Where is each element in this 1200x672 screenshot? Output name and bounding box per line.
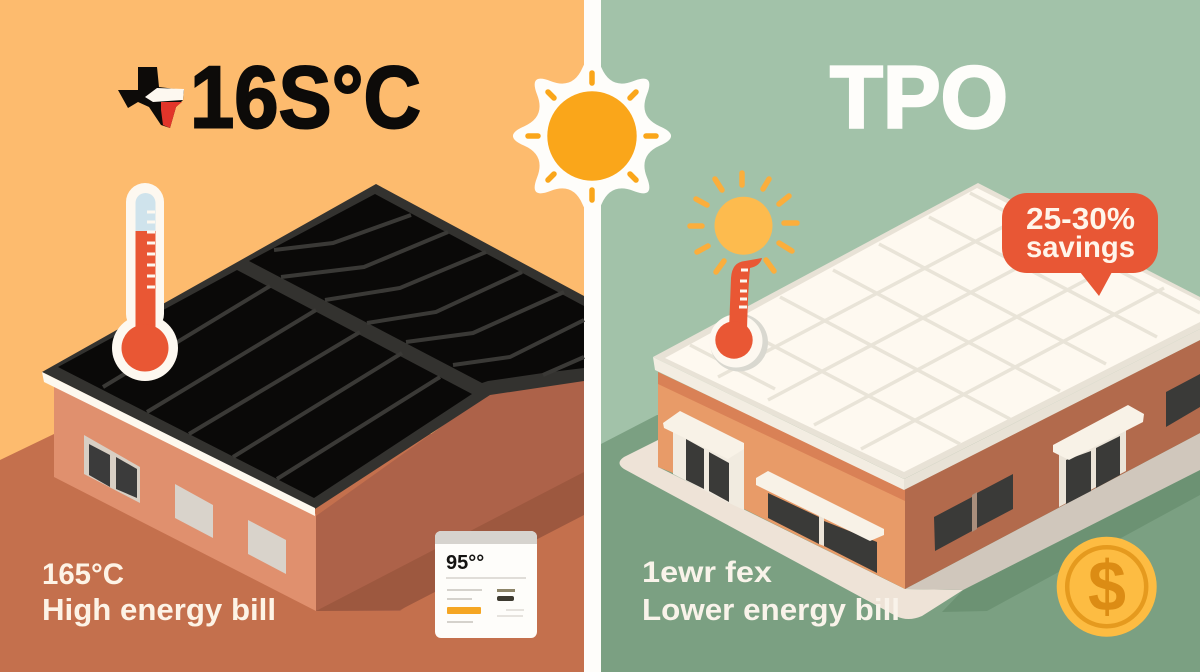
callout: savings: savings bbox=[1026, 231, 1135, 264]
building: black roof bbox=[42, 184, 584, 611]
icon: dollar coin: $ bbox=[1088, 548, 1126, 626]
icon: small sun bbox=[690, 173, 797, 272]
callout: savings: 25-30% bbox=[1026, 201, 1135, 236]
heading: black roof temperature: 16S°C bbox=[190, 48, 421, 146]
white membrane roof bbox=[653, 183, 1200, 479]
label: lower energy bill: Lower energy bill bbox=[642, 592, 900, 627]
icon: energy bill card bbox=[435, 531, 537, 638]
wide window with awning bbox=[756, 471, 884, 573]
window with awning bbox=[663, 411, 744, 510]
thermometer: hot bbox=[112, 183, 178, 381]
side window with awning bbox=[1053, 405, 1144, 507]
building: TPO roof bbox=[620, 183, 1200, 619]
roof fascia bbox=[653, 357, 904, 490]
concrete slab bbox=[620, 433, 1200, 619]
panel: black roof bbox=[0, 0, 584, 672]
label: high energy bill bbox=[42, 558, 276, 627]
thermometer: cool bbox=[710, 258, 768, 372]
label: high energy bill: High energy bill bbox=[42, 592, 276, 627]
roof: dark shingles bbox=[42, 184, 584, 509]
side window bbox=[934, 474, 1013, 551]
icon: dollar coin bbox=[1057, 537, 1157, 637]
heading: TPO: TPO bbox=[830, 48, 1008, 146]
icon: Texas bbox=[118, 67, 184, 128]
ground shadow bbox=[942, 470, 1200, 612]
icon: central sun bbox=[513, 57, 671, 215]
white fascia bbox=[42, 372, 315, 516]
window frame bbox=[84, 435, 140, 503]
icon: energy bill card: 95°° bbox=[446, 552, 484, 574]
label: lower energy bill: 1ewr fex bbox=[642, 556, 772, 589]
callout: savings bbox=[1002, 193, 1158, 296]
panel: TPO roof bbox=[601, 0, 1200, 672]
label: high energy bill: 165°C bbox=[42, 558, 124, 591]
label: lower energy bill bbox=[642, 556, 900, 627]
